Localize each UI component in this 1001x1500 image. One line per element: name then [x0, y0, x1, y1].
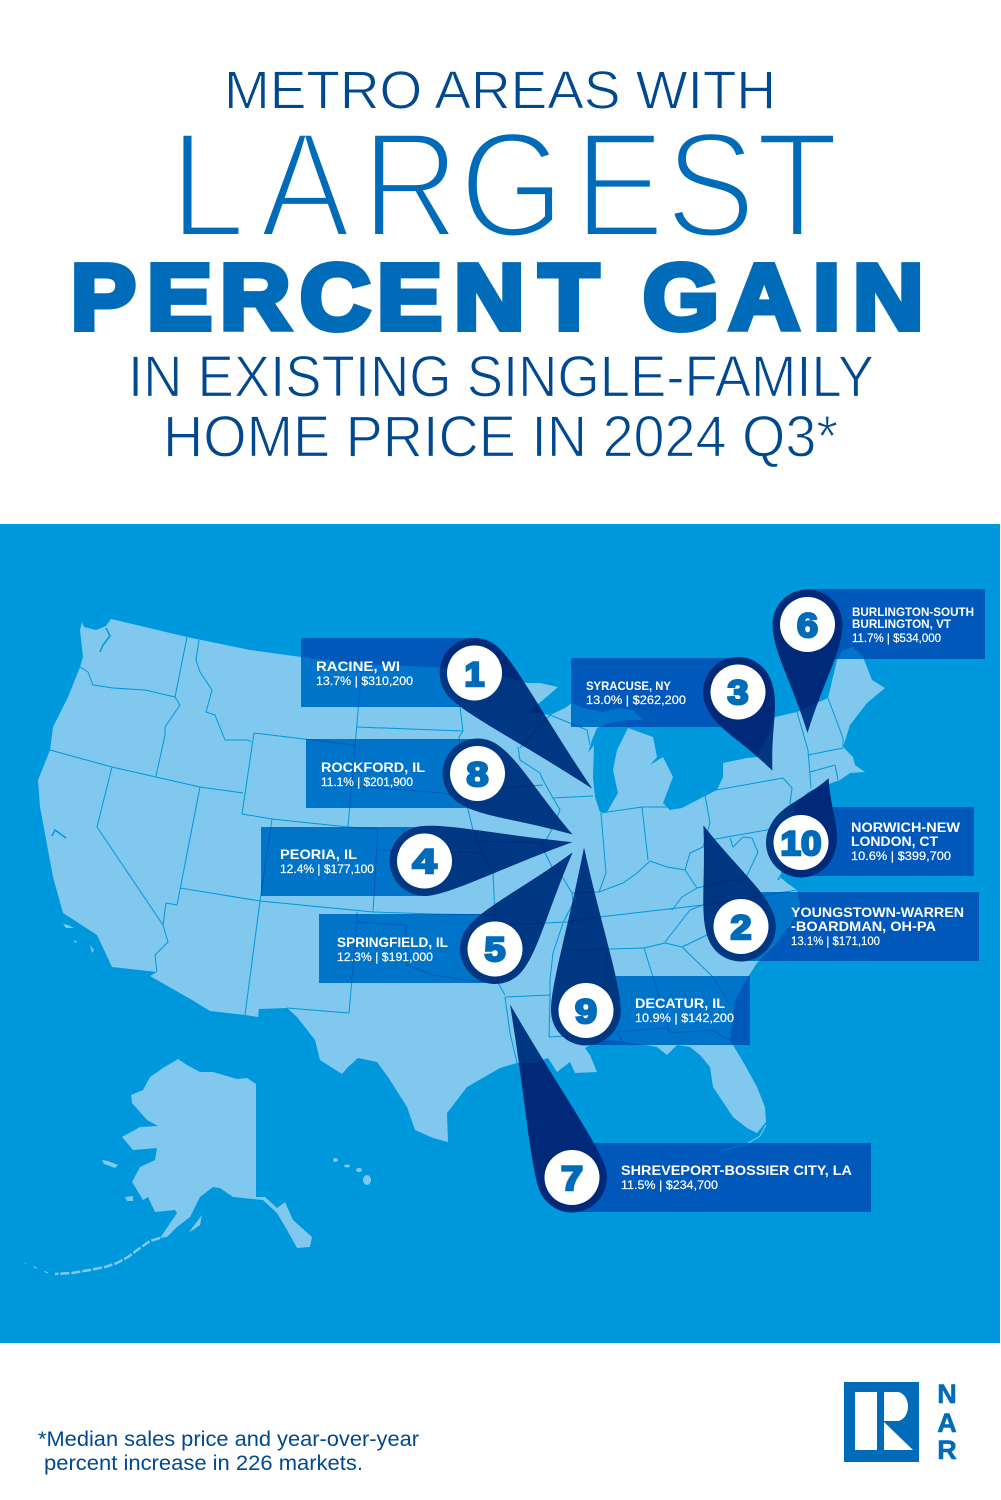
label: Youngstown: 13.1% | $171,100 [791, 934, 880, 948]
label: Shreveport: SHREVEPORT-BOSSIER CITY, LA [621, 1163, 852, 1178]
label: Shreveport [621, 1163, 852, 1192]
pin 5: 5 [484, 931, 506, 969]
label: Youngstown: YOUNGSTOWN-WARREN [791, 905, 964, 920]
pin 6 [772, 590, 842, 733]
pin 9 [549, 847, 621, 1046]
florida keys [720, 1125, 766, 1151]
pin 6: 6 [797, 607, 818, 645]
pin 7 [477, 992, 617, 1222]
label: Syracuse: 13.0% | $262,200 [586, 693, 686, 707]
label: Youngstown [791, 905, 964, 948]
label: Peoria: 12.4% | $177,100 [280, 862, 374, 876]
label: Decatur [635, 996, 734, 1025]
pin 7: 7 [561, 1160, 583, 1198]
label: Peoria: PEORIA, IL [280, 847, 357, 862]
label: Norwich: NORWICH-NEW [851, 820, 960, 835]
map: contiguous United States [38, 619, 885, 1151]
logo letters: R [937, 1435, 957, 1465]
label: Burlington [852, 605, 974, 645]
footnote: *Median sales price and year-over-year [38, 1428, 419, 1451]
label: Racine [316, 659, 413, 688]
footnote [38, 1428, 419, 1475]
pin 5 [446, 830, 600, 998]
logo letters: A [937, 1408, 957, 1438]
map: alaska [25, 1059, 312, 1274]
pin 8 [429, 725, 591, 864]
label: Norwich: 10.6% | $399,700 [851, 849, 951, 863]
logo letters: N [937, 1379, 957, 1409]
logo mark [844, 1382, 919, 1462]
pin 2 [671, 813, 786, 972]
label: Shreveport: 11.5% | $234,700 [621, 1178, 718, 1192]
label: Norwich: LONDON, CT [851, 834, 939, 849]
pin 8: 8 [466, 756, 488, 794]
pin 9: 9 [575, 993, 597, 1031]
pin 2: 2 [730, 909, 752, 947]
label: Decatur: DECATUR, IL [635, 996, 725, 1011]
pin 1: 1 [464, 656, 484, 694]
label: Burlington: 11.7% | $534,000 [852, 631, 941, 645]
title line: percent gain: PERCENT GAIN [71, 246, 924, 349]
label: Racine: RACINE, WI [316, 659, 400, 674]
title line: metro areas with: METRO AREAS WITH [224, 60, 776, 120]
pin 4 [385, 807, 577, 900]
california channel islands [63, 924, 94, 953]
map: hawaii [333, 1158, 371, 1185]
label: Burlington: BURLINGTON, VT [852, 617, 952, 631]
label: Norwich [851, 820, 960, 863]
panel: map background [0, 524, 1000, 1343]
footnote: percent increase in 226 markets. [44, 1452, 363, 1475]
label: Syracuse [586, 679, 686, 707]
label: Syracuse: SYRACUSE, NY [586, 679, 671, 693]
pin 10 [755, 764, 861, 888]
label: Rockford: ROCKFORD, IL [321, 760, 425, 775]
pin 3: 3 [728, 674, 748, 712]
label: Springfield: SPRINGFIELD, IL [337, 935, 448, 950]
title line: largest: LARGEST [170, 102, 838, 269]
pin 1 [425, 624, 617, 814]
label: Rockford: 11.1% | $201,900 [321, 775, 413, 789]
label: Racine: 13.7% | $310,200 [316, 674, 413, 688]
label: Springfield [337, 935, 448, 964]
label: Decatur: 10.9% | $142,200 [635, 1011, 734, 1025]
title line: home price: HOME PRICE IN 2024 Q3* [163, 404, 838, 470]
label: Springfield: 12.3% | $191,000 [337, 950, 433, 964]
label: Youngstown: -BOARDMAN, OH-PA [791, 919, 936, 934]
label: Peoria [280, 847, 374, 876]
pin 3 [692, 646, 805, 785]
label: Rockford [321, 760, 425, 789]
logo: NAR [844, 1379, 957, 1465]
pin 10: 10 [780, 825, 822, 863]
logo letters [937, 1379, 957, 1465]
title [71, 60, 924, 470]
pin 4: 4 [412, 843, 437, 881]
title line: in existing single-family: IN EXISTING SINGLE-FAMILY [128, 344, 874, 410]
label: Burlington: BURLINGTON-SOUTH [852, 605, 974, 619]
coastal inlets [52, 628, 783, 880]
callout boxes [261, 589, 985, 1212]
state borders [50, 637, 843, 1063]
